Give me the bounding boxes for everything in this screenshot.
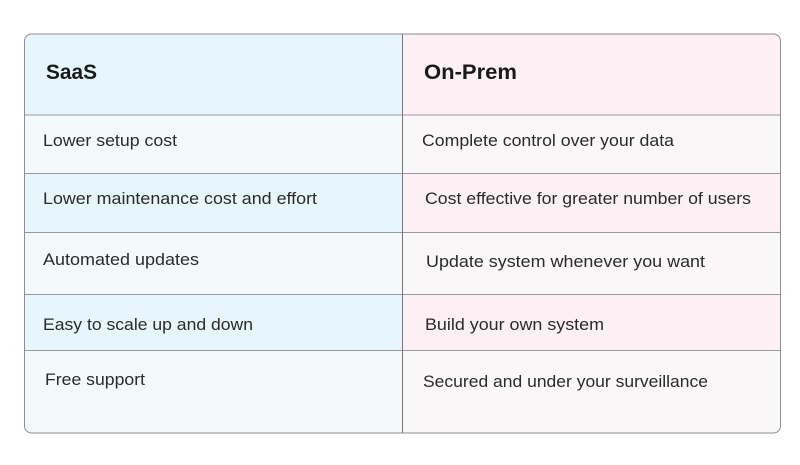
SaaS row 5: Free support [45,371,145,389]
SaaS row 1: Lower setup cost [43,132,177,150]
column: On-Prem [422,61,751,391]
SaaS row 4: Easy to scale up and down [43,316,253,334]
On-Prem row 1: Complete control over your data [422,132,675,150]
column: SaaS [43,61,317,389]
On-Prem row 2: Cost effective for greater number of users [425,190,751,208]
On-Prem row 5: Secured and under your surveillance [423,373,708,391]
heading: SaaS: SaaS [46,61,97,84]
On-Prem row 4: Build your own system [425,316,604,334]
On-Prem row 3: Update system whenever you want [426,253,705,271]
SaaS row 2: Lower maintenance cost and effort [43,190,317,208]
SaaS row 3: Automated updates [43,251,199,269]
heading: On-Prem: On-Prem [424,61,517,84]
